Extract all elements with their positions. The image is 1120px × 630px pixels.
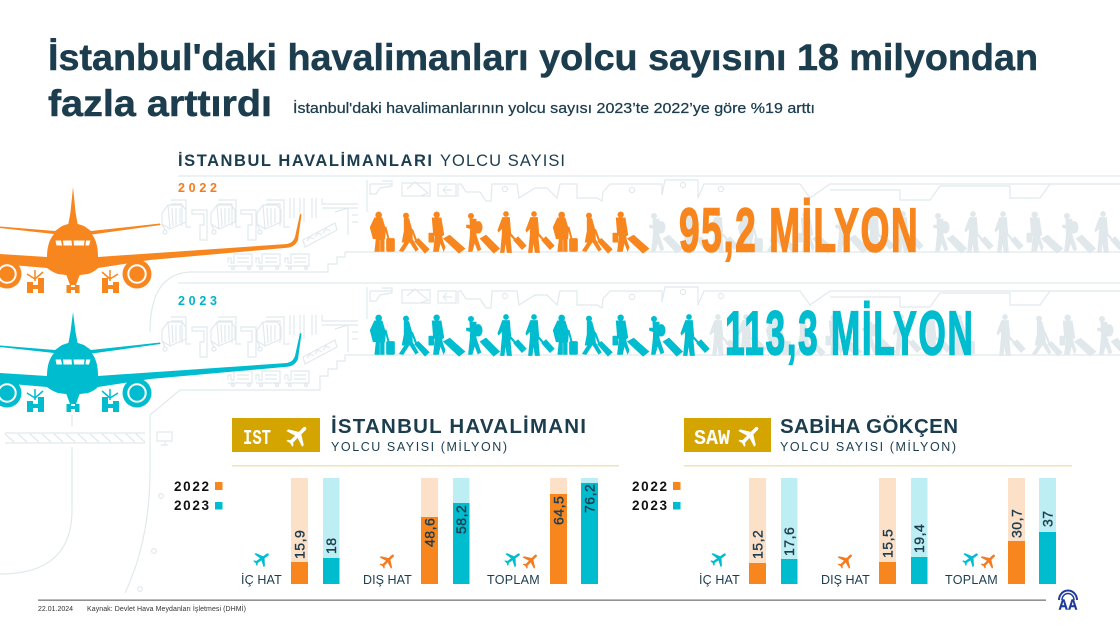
heading: SAW <box>780 415 958 454</box>
section heading: İSTANBUL HAVALİMANLARI <box>178 152 432 170</box>
title: İstanbul'daki havalimanları yolcu sayısını 18 milyondan <box>48 37 1038 78</box>
group: IST toplam: TOPLAM <box>487 573 540 587</box>
group: IST toplam: 64,5 <box>550 496 566 525</box>
heading: IST: YOLCU SAYISI (MİLYON) <box>331 440 507 454</box>
badge: IST <box>232 418 320 452</box>
group: SAW toplam: TOPLAM <box>945 573 998 587</box>
legend: IST: 2023 <box>174 498 209 513</box>
group: IST iç hat: 15,9 <box>292 530 308 559</box>
footer rule and source: 22.01.2024 <box>38 606 73 613</box>
passengers: 2022 row <box>370 212 649 253</box>
badge: SAW <box>684 418 771 452</box>
badge: IST: IST <box>243 428 271 451</box>
heading: IST <box>331 415 586 454</box>
logo: AA <box>1058 590 1078 614</box>
passengers: 2023 row <box>370 315 709 356</box>
group: SAW dış hat: DIŞ HAT <box>821 573 870 587</box>
group: SAW iç hat: 15,2 <box>750 530 766 559</box>
group: SAW toplam <box>945 478 1056 587</box>
group: SAW dış hat: 19,4 <box>911 524 927 553</box>
group: SAW iç hat <box>699 478 798 587</box>
section heading <box>178 152 565 170</box>
group: IST toplam <box>487 478 598 587</box>
group: SAW dış hat: 15,5 <box>880 529 896 558</box>
group: IST dış hat: 58,2 <box>453 505 469 534</box>
panel: IST <box>174 415 619 587</box>
legend: SAW <box>632 479 680 513</box>
group: IST dış hat: DIŞ HAT <box>363 573 412 587</box>
group: IST iç hat <box>241 478 340 587</box>
label: 2022: 2022 <box>178 181 217 195</box>
legend: IST: 2022 <box>174 479 209 494</box>
title <box>48 37 1038 124</box>
group: SAW toplam: 37 <box>1040 510 1056 527</box>
badge: SAW: SAW <box>694 428 730 451</box>
group: SAW iç hat: 17,6 <box>781 527 797 556</box>
label: 2023: 2023 <box>178 294 217 308</box>
group: SAW toplam: 30,7 <box>1008 509 1024 538</box>
group: IST toplam: 76,2 <box>582 484 598 513</box>
group: SAW dış hat <box>821 478 928 587</box>
group: IST iç hat: 18 <box>323 537 339 554</box>
legend: SAW: 2023 <box>632 498 667 513</box>
grey passengers: 2022 row <box>650 212 1120 253</box>
group: IST dış hat <box>363 478 470 587</box>
legend: SAW: 2022 <box>632 479 667 494</box>
footer rule and source <box>38 600 1046 613</box>
group: IST iç hat: İÇ HAT <box>241 573 282 587</box>
plane: 2023 <box>0 312 302 412</box>
value: 113,3 milyon: 113,3 MİLYON <box>725 298 973 368</box>
plane: 2022 <box>0 187 302 293</box>
logo: AA: AA <box>1058 596 1078 614</box>
subtitle: İstanbul'daki havalimanlarının yolcu sayısı 2023’te 2022’ye göre %19 arttı <box>293 99 815 117</box>
legend: IST <box>174 479 222 513</box>
heading: SAW: SABİHA GÖKÇEN <box>780 415 958 438</box>
heading: IST: İSTANBUL HAVALİMANI <box>331 415 586 438</box>
heading: SAW: YOLCU SAYISI (MİLYON) <box>780 440 956 454</box>
panel: SAW <box>632 415 1072 587</box>
group: IST dış hat: 48,6 <box>422 518 438 547</box>
grey passengers: 2023 row <box>710 315 1120 356</box>
section heading: YOLCU SAYISI <box>440 152 565 170</box>
value: 95,2 milyon: 95,2 MİLYON <box>679 196 918 265</box>
title: fazla arttırdı <box>48 83 272 124</box>
group: SAW iç hat: İÇ HAT <box>699 573 740 587</box>
footer rule and source: Kaynak: Devlet Hava Meydanları İşletmesi (DHMİ) <box>87 604 246 613</box>
